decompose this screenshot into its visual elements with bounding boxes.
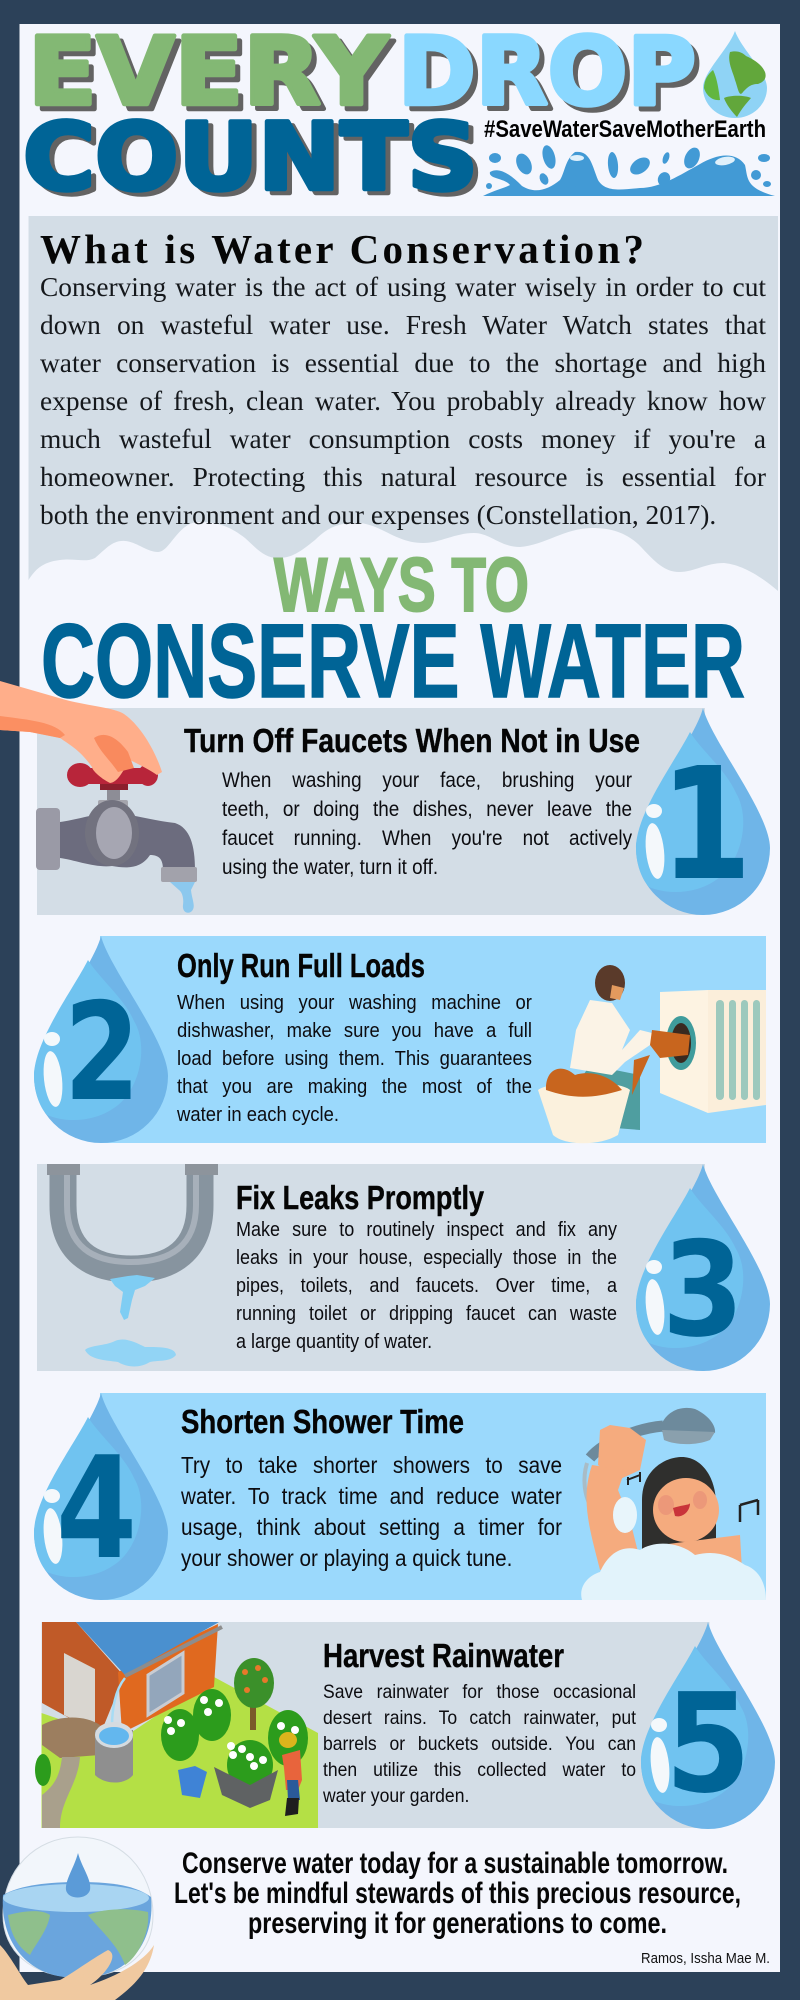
icon: droplet number 4 <box>34 1393 168 1600</box>
text block: card 2 body <box>177 991 532 1126</box>
icon: person in shower <box>581 1408 766 1600</box>
panel: card 2 background <box>100 936 766 1143</box>
text block: card 4 body: Try to take shorter showers to save <box>181 1452 562 1478</box>
text block: card 1 body: teeth, or doing the dishes, never leave the <box>222 798 632 821</box>
text block: card 1 body: using the water, turn it off. <box>222 856 438 879</box>
text block: intro paragraph <box>40 272 766 530</box>
text block: card 1 body: faucet running. When you're not actively <box>222 827 632 850</box>
icon: woman at washing machine <box>538 965 766 1143</box>
icon: water splash <box>483 144 775 196</box>
icon: droplet number 3: 3 <box>662 1213 744 1366</box>
icon: earth in glass dome held by hands <box>0 1837 154 2000</box>
text block: intro paragraph: much wasteful water consumption costs money if you're a <box>40 424 766 454</box>
text block: intro paragraph: expense of fresh, clean water. You probably already know how <box>40 386 766 416</box>
text block: card 3 body: a large quantity of water. <box>236 1331 432 1353</box>
text block: card 5 body: then utilize this collected water to <box>323 1759 636 1781</box>
icon: droplet number 4: 4 <box>56 1427 137 1591</box>
title word: EVERY: EVERY <box>28 18 389 127</box>
text block: card 3 body: Make sure to routinely inspect and fix any <box>236 1219 617 1241</box>
heading: shorten shower time: Shorten Shower Time <box>181 1403 464 1440</box>
icon: faucet <box>36 763 197 913</box>
panel: card 3 background <box>37 1164 705 1371</box>
text block: intro paragraph: both the environment and our expenses (Constellation, 2017). <box>40 500 716 530</box>
text block: intro paragraph: homeowner. Protecting this natural resource is essential for <box>40 462 766 492</box>
text block: card 5 body: water your garden. <box>323 1785 469 1807</box>
text block: card 5 body: barrels or buckets outside. You can <box>323 1733 636 1755</box>
illustration: rainwater garden <box>35 1622 318 1828</box>
text block: card 3 body: leaks in your house, especially those in the <box>236 1247 617 1269</box>
text block: card 2 body: load before using them. This guarantees <box>177 1047 532 1070</box>
text block: card 1 body <box>222 769 632 879</box>
panel: card 1 background <box>37 708 705 915</box>
text block: card 2 body: water in each cycle. <box>177 1103 339 1126</box>
text block: card 2 body: that you are making the most of the <box>177 1075 532 1098</box>
icon: droplet number 2: 2 <box>64 974 140 1131</box>
heading: ways to: WAYS TO <box>274 543 529 628</box>
heading: what is water conservation: What is Water Conservation? <box>40 226 644 272</box>
text block: card 4 body: usage, think about setting a timer for <box>181 1514 562 1540</box>
panel: card 5 background <box>42 1622 710 1828</box>
heading: fix leaks promptly: Fix Leaks Promptly <box>236 1179 485 1216</box>
heading: only run full loads: Only Run Full Loads <box>177 947 425 984</box>
text block: card 3 body <box>236 1219 617 1353</box>
heading: harvest rainwater: Harvest Rainwater <box>323 1637 564 1674</box>
author credit: Ramos, Issha Mae M. <box>641 1950 770 1967</box>
text block: card 4 body <box>181 1452 562 1571</box>
icon: hand on faucet <box>0 681 162 783</box>
title word: DROP: DROP <box>398 18 696 127</box>
text block: card 4 body: your shower or playing a quick tune. <box>181 1545 512 1571</box>
icon: droplet number 3 <box>636 1164 770 1371</box>
icon: leaking pipe <box>47 1164 218 1366</box>
text block: card 1 body: When washing your face, brushing your <box>222 769 632 792</box>
panel: what is water conservation background <box>28 216 778 591</box>
text block: card 5 body <box>323 1681 636 1807</box>
text block: card 4 body: water. To track time and reduce water <box>181 1483 562 1509</box>
text block: card 3 body: running toilet or dripping faucet can waste <box>236 1303 617 1325</box>
text block: card 5 body: Save rainwater for those occasional <box>323 1681 636 1703</box>
text block: card 2 body: dishwasher, make sure you have a full <box>177 1019 532 1042</box>
text block: card 5 body: desert rains. To catch rainwater, put <box>323 1707 636 1729</box>
heading: turn off faucets: Turn Off Faucets When Not in Use <box>184 722 640 759</box>
icon: droplet number 2 <box>34 936 168 1143</box>
title: Every Drop Counts <box>23 18 696 211</box>
text block: intro paragraph: Conserving water is the act of using water wisely in order to cut <box>40 272 766 302</box>
title word: COUNTS: COUNTS <box>23 103 478 211</box>
text block: intro paragraph: water conservation is essential due to the shortage and high <box>40 348 766 378</box>
panel: card 4 background <box>100 1393 766 1600</box>
icon: droplet number 1: 1 <box>660 734 752 915</box>
closing line 3: preserving it for generations to come. <box>248 1907 667 1940</box>
text block: card 3 body: pipes, toilets, and faucets. Over time, a <box>236 1275 617 1297</box>
text block: intro paragraph: down on wasteful water use. Fresh Water Watch states that <box>40 310 766 340</box>
icon: droplet number 5: 5 <box>665 1665 751 1824</box>
icon: droplet number 5 <box>641 1622 775 1829</box>
icon: water drop with earth <box>703 31 767 118</box>
text block: card 2 body: When using your washing machine or <box>177 991 532 1014</box>
